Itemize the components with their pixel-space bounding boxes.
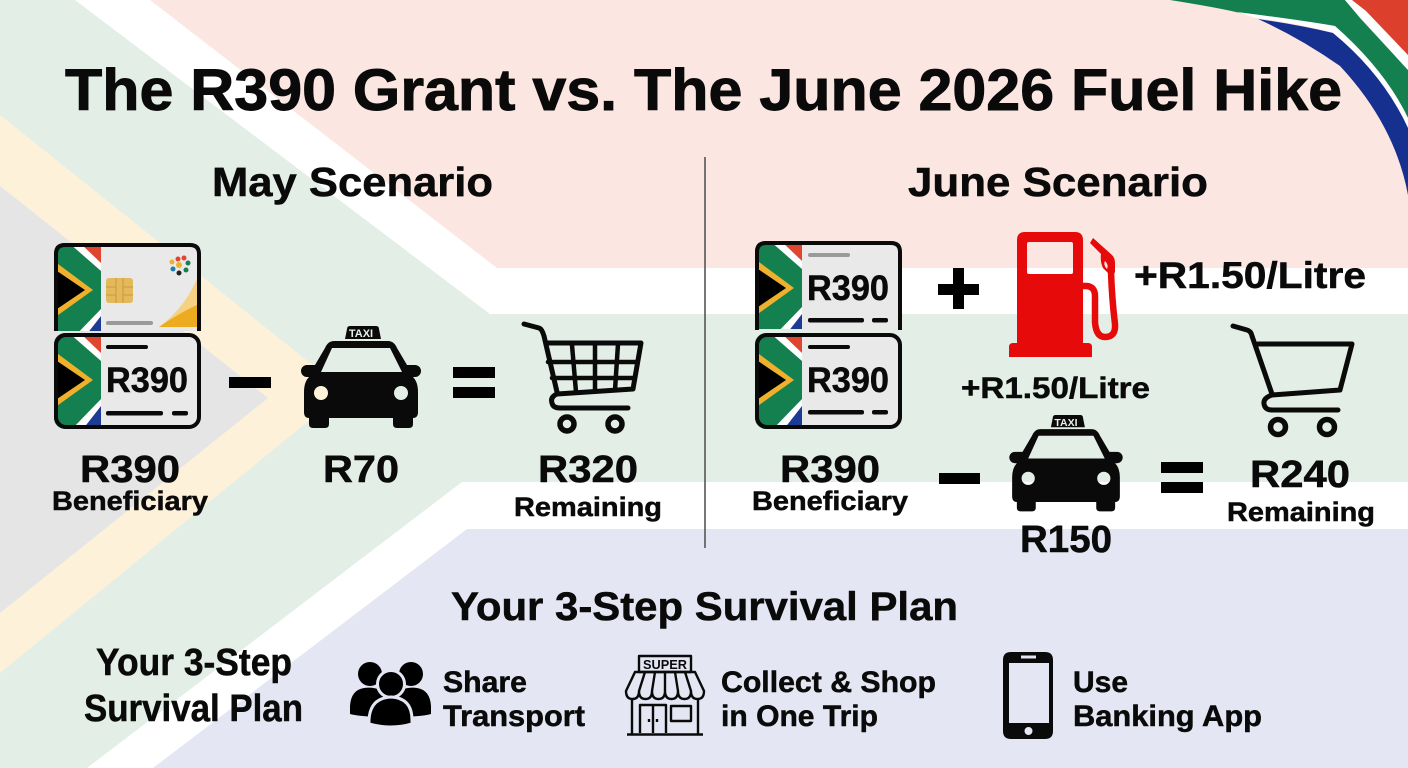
text: use banking app (1073, 666, 1262, 733)
text: collect and shop: in One Trip (721, 700, 878, 733)
text: share transport (443, 666, 585, 733)
label: R150: R150 (1020, 519, 1112, 561)
icon: R390 card bottom (755, 333, 902, 429)
label: R320 Remaining (514, 449, 662, 522)
label: R240 Remaining: Remaining (1227, 497, 1375, 527)
label: R240 Remaining (1227, 454, 1375, 527)
panel: May scenario (52, 243, 662, 522)
icon: taxi (1009, 415, 1123, 511)
text: collect and shop (721, 666, 936, 733)
minus sign (229, 377, 271, 388)
label: R320 Remaining: R320 (538, 449, 638, 491)
text: share transport: Share (443, 666, 527, 699)
icon: R390 card (54, 333, 201, 429)
icon: taxi: TAXI (1054, 417, 1078, 429)
label: R240 Remaining: R240 (1250, 454, 1350, 496)
icon: R390 card bottom: R390 (807, 361, 889, 400)
panel: June scenario (752, 232, 1375, 561)
label: fuel price increase: +R1.50/Litre (1134, 255, 1366, 296)
label: R390 Beneficiary: Beneficiary (52, 486, 208, 516)
panel: survival plan row (84, 642, 1262, 739)
heading: June Scenario: June Scenario (908, 159, 1208, 205)
icon: empty shopping cart (1233, 326, 1352, 434)
icon: full shopping cart (524, 324, 641, 431)
icon: taxi (301, 326, 421, 428)
heading: May Scenario: May Scenario (212, 159, 493, 205)
label: R390 Beneficiary: Beneficiary (752, 486, 908, 516)
text: collect and shop: Collect & Shop (721, 666, 936, 699)
label: R390 Beneficiary (752, 449, 908, 516)
minus sign (939, 473, 980, 484)
icon: supermarket (626, 656, 704, 734)
heading: survival plan: Your 3-Step Survival Plan (451, 585, 958, 629)
icon: people (350, 662, 431, 727)
label: taxi price increase: +R1.50/Litre (961, 372, 1150, 405)
title: The R390 Grant vs. The June 2026 Fuel Hike (65, 58, 1342, 123)
icon: R390 card top: R390 (807, 269, 889, 308)
text: use banking app: Banking App (1073, 700, 1262, 733)
icon: taxi: TAXI (349, 328, 373, 340)
label: R390 Beneficiary (52, 449, 208, 516)
label: R390 Beneficiary: R390 (780, 449, 880, 491)
plus sign (938, 268, 979, 309)
icon: R390 card top (755, 241, 902, 337)
side heading: Your 3-Step (96, 642, 292, 684)
icon: red fuel pump (1009, 232, 1115, 357)
side heading (84, 642, 303, 730)
label: R320 Remaining: Remaining (514, 492, 662, 522)
label: R390 Beneficiary: R390 (80, 449, 180, 491)
icon: R390 card: R390 (106, 361, 188, 400)
side heading: Survival Plan (84, 688, 303, 730)
text: share transport: Transport (443, 700, 585, 733)
icon: phone (1003, 652, 1053, 739)
equals sign (1161, 462, 1203, 493)
equals sign (453, 367, 495, 398)
label: R70: R70 (323, 449, 399, 491)
text: use banking app: Use (1073, 666, 1128, 699)
icon: supermarket: SUPER (643, 658, 687, 672)
icon: grant card with chip (54, 243, 201, 339)
corner flag ribbon (1170, 0, 1408, 195)
